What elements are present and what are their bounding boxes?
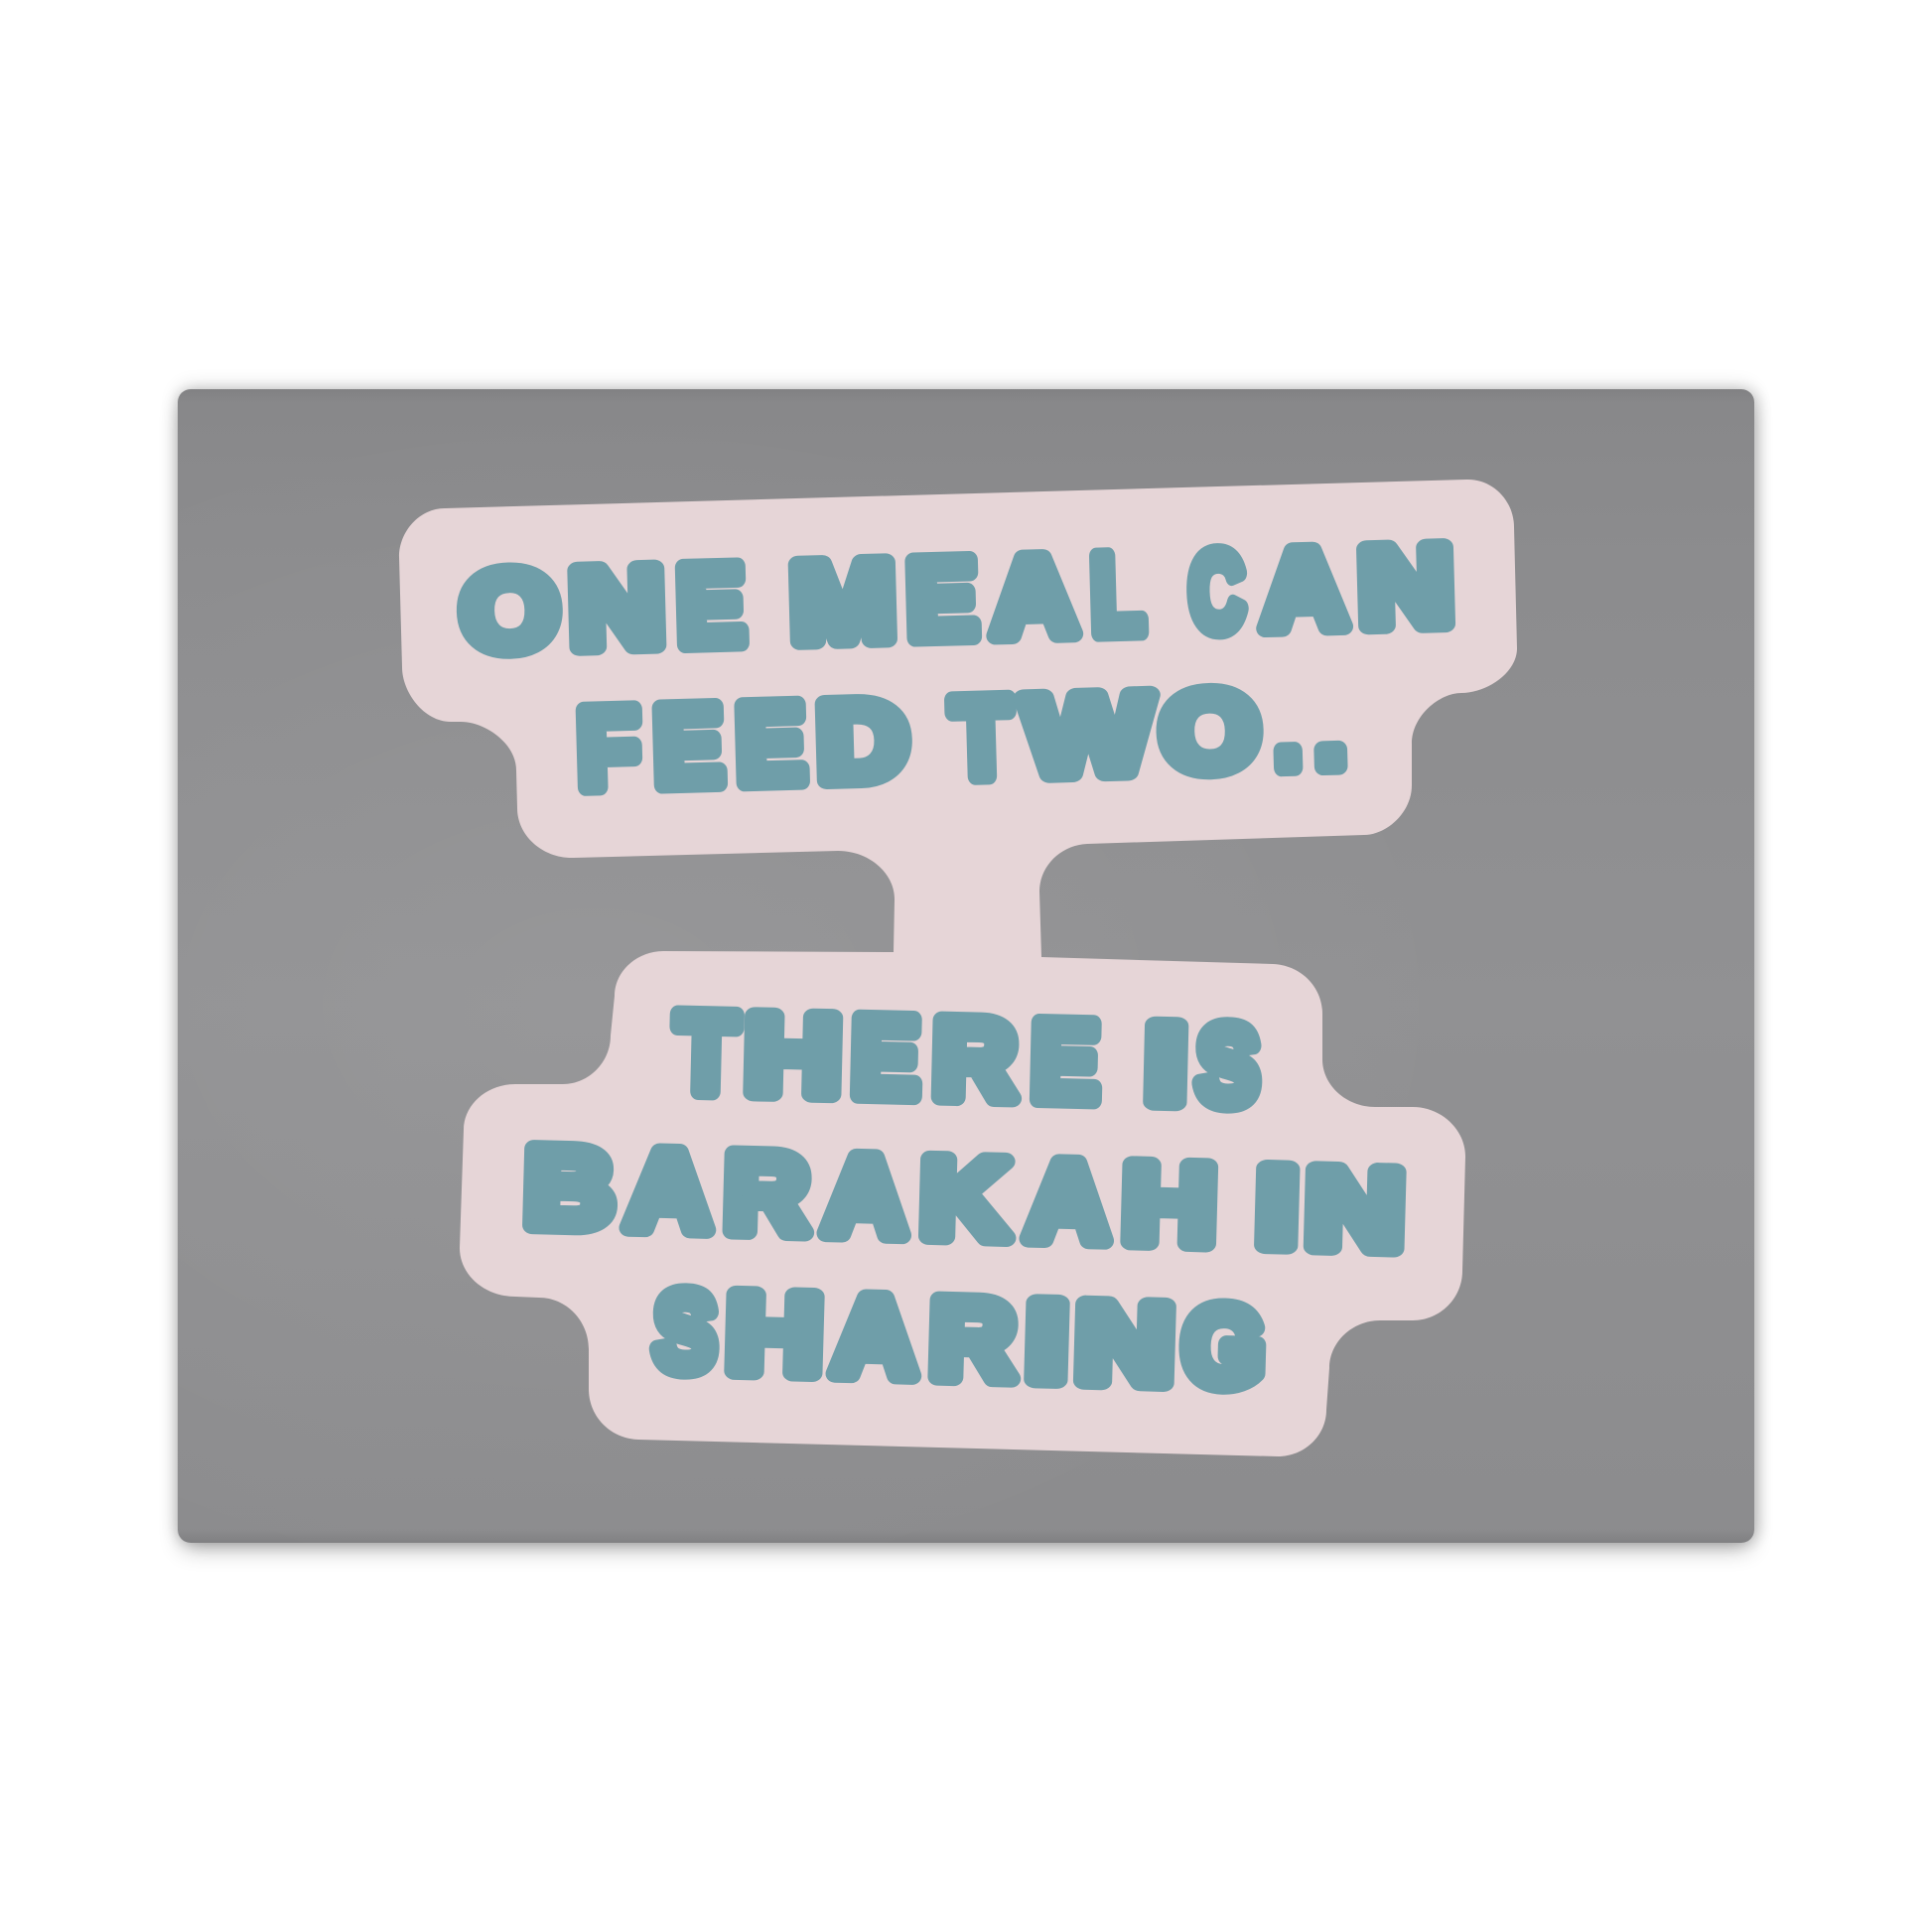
text line: barakah in: A: [822, 1133, 908, 1259]
text line: there is: T: [674, 991, 739, 1116]
text line: there is: I: [1145, 1002, 1187, 1126]
heading line: feed two: W: [1024, 671, 1153, 798]
heading line: one meal can: O: [460, 547, 560, 674]
text line: sharing: R: [928, 1276, 1017, 1403]
text line: barakah in: N: [1305, 1146, 1406, 1273]
heading line: feed two: .: [1272, 667, 1303, 791]
text line: sharing: S: [652, 1269, 718, 1394]
heading line: one meal can: M: [789, 538, 897, 665]
heading line: one meal can: A: [1260, 526, 1347, 652]
text line: barakah in: K: [919, 1136, 1011, 1262]
text line: sharing: N: [1074, 1280, 1175, 1407]
text line: there is: E: [1031, 999, 1100, 1124]
text line: there is: H: [745, 992, 842, 1118]
heading line: one meal can: A: [990, 533, 1077, 659]
heading line: one meal can: C: [1188, 529, 1246, 654]
text line: there is: E: [851, 995, 920, 1120]
text line: barakah in: H: [1121, 1141, 1217, 1268]
heading line: feed two: .: [1312, 665, 1347, 790]
heading line: feed two: E: [735, 681, 806, 806]
text line: sharing: I: [1026, 1279, 1068, 1404]
text line: there is: S: [1195, 1003, 1260, 1128]
heading line: feed two: F: [576, 685, 640, 811]
heading line: one meal can: L: [1089, 531, 1144, 657]
text line: sharing: H: [725, 1271, 824, 1397]
text line: barakah in: R: [723, 1130, 810, 1257]
text line: barakah in: B: [523, 1125, 616, 1251]
text line: there is: R: [932, 997, 1018, 1122]
heading line: one meal can: N: [568, 544, 665, 671]
text line: barakah in: A: [1025, 1139, 1111, 1265]
heading line: feed two: O: [1160, 668, 1261, 795]
quote text block: [460, 523, 1454, 1410]
heading line: feed two: D: [816, 678, 909, 804]
text line: sharing: G: [1181, 1284, 1266, 1410]
text line: barakah in: A: [624, 1128, 713, 1254]
heading line: feed two: E: [652, 683, 724, 809]
panel: grey glass board: [178, 389, 1754, 1543]
heading line: feed two: T: [950, 675, 1013, 800]
heading line: one meal can: E: [676, 542, 746, 668]
pink speech blob shape: [399, 480, 1517, 1456]
heading line: one meal can: N: [1357, 523, 1454, 649]
text line: barakah in: I: [1255, 1145, 1299, 1270]
text line: sharing: A: [831, 1274, 918, 1400]
heading line: one meal can: E: [905, 536, 978, 662]
